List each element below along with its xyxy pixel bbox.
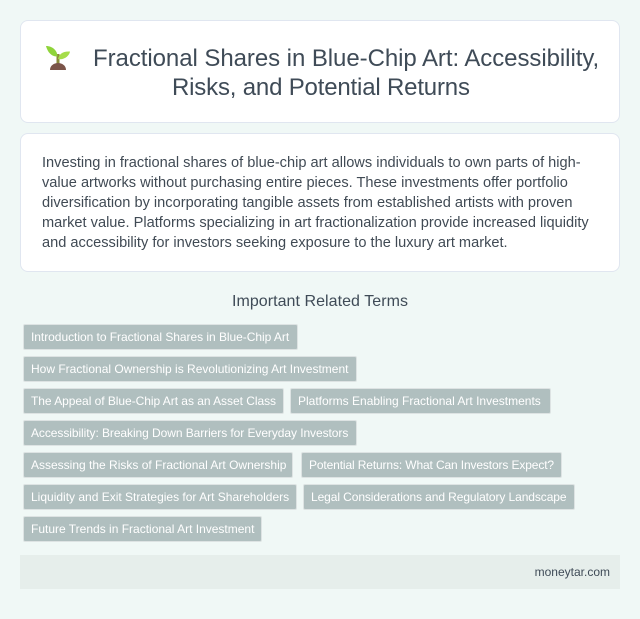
chip: Introduction to Fractional Shares in Blue-Chip Art [31,330,289,344]
icon: seedling [46,46,70,70]
chip: Liquidity and Exit Strategies for Art Shareholders [31,490,289,504]
title [93,45,599,101]
title: Fractional Shares in Blue-Chip Art: Accessibility, [93,45,599,72]
text block: introduction paragraph [42,155,589,251]
chip [23,420,357,446]
text block: introduction paragraph: market value. Platforms specializing in art fractionalization provide increased liquidity [42,215,589,231]
chip: Assessing the Risks of Fractional Art Ownership [31,458,286,472]
chip: Platforms Enabling Fractional Art Investments [298,394,541,408]
chip: The Appeal of Blue-Chip Art as an Asset Class [31,394,276,408]
heading: related terms: Important Related Terms [232,293,408,310]
chip [23,484,297,510]
chip [23,356,357,382]
chip [303,484,575,510]
title: Risks, and Potential Returns [172,74,470,101]
chip: Accessibility: Breaking Down Barriers for Everyday Investors [31,426,348,440]
chip [290,388,551,414]
chip: Legal Considerations and Regulatory Landscape [311,490,566,504]
chip [23,324,298,350]
panel: introduction [20,133,620,272]
panel: title card [20,20,620,123]
chip [23,452,293,478]
chip [23,388,284,414]
chip: Potential Returns: What Can Investors Expect? [309,458,554,472]
chip: How Fractional Ownership is Revolutionizing Art Investment [31,362,348,376]
text block: introduction paragraph: Investing in fractional shares of blue-chip art allows individuals to own parts of high- [42,155,581,171]
footer bar [20,555,620,589]
text block: introduction paragraph: diversification by incorporating tangible assets from established artists with proven [42,195,572,211]
panel: term chips [23,324,575,542]
text block: introduction paragraph: value artworks without purchasing entire pieces. These investments offer portfolio [42,175,568,191]
chip [301,452,562,478]
chip [23,516,262,542]
chip: Future Trends in Fractional Art Investment [31,522,254,536]
footer text: moneytar.com [535,565,610,579]
text block: introduction paragraph: and accessibility for investors seeking exposure to the luxury art market. [42,235,508,251]
